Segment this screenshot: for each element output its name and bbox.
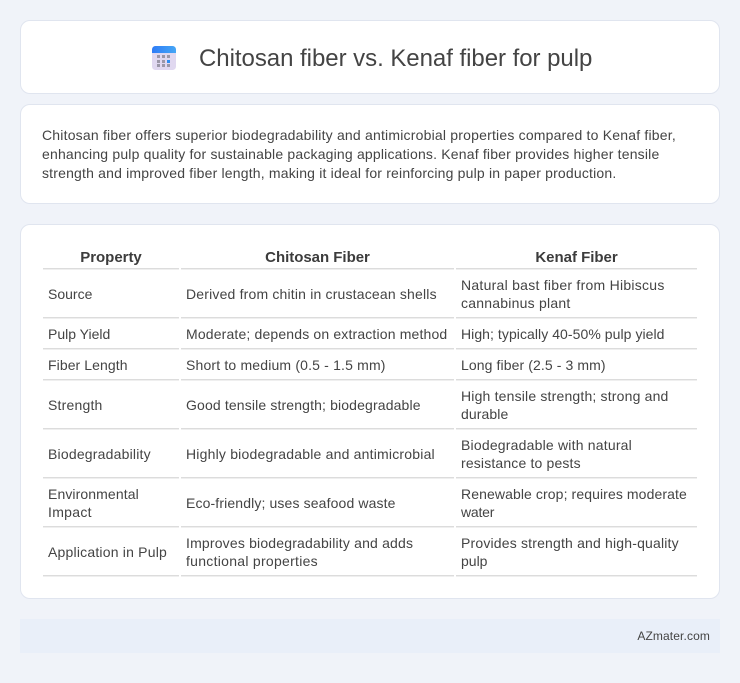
row: strength: durable [461,406,508,422]
row: fiber length: Long fiber (2.5 - 3 mm) [461,357,606,373]
row: biodegradability [48,437,632,471]
table header: Kenaf Fiber [535,249,618,266]
row: application in pulp: Improves biodegradability and adds [186,535,413,551]
row: fiber length: Fiber Length [48,357,128,373]
title: Chitosan fiber vs. Kenaf fiber for pulp [199,45,592,72]
row: strength: High tensile strength; strong and [461,388,669,404]
summary card [20,104,720,204]
table header: Property [80,249,142,266]
row: biodegradability: Highly biodegradable and antimicrobial [186,446,435,462]
comparison table [43,249,697,577]
summary text: Chitosan fiber offers superior biodegradability and antimicrobial properties compared to Kenaf fiber, [42,127,676,143]
row: source: Source [48,286,92,302]
summary text: enhancing pulp quality for sustainable packaging applications. Kenaf fiber provides higher tensile [42,146,659,162]
row: pulp yield: Moderate; depends on extraction method [186,326,447,342]
footer credit: AZmater.com [637,629,710,643]
row: pulp yield: High; typically 40-50% pulp yield [461,326,665,342]
summary text [42,127,676,181]
row: fiber length: Short to medium (0.5 - 1.5 mm) [186,357,386,373]
table header: Chitosan Fiber [265,249,370,266]
row: strength: Strength [48,397,103,413]
row: source: cannabinus plant [461,295,571,311]
row: strength: Good tensile strength; biodegradable [186,397,421,413]
row: environmental impact [48,486,687,520]
row: environmental impact: Impact [48,504,92,520]
row: pulp yield: Pulp Yield [48,326,110,342]
row: fiber length [48,357,606,373]
row: environmental impact: Eco-friendly; uses seafood waste [186,495,396,511]
row: application in pulp: Provides strength and high-quality [461,535,679,551]
table header [80,249,618,266]
row: environmental impact: Renewable crop; requires moderate [461,486,687,502]
row: source: Natural bast fiber from Hibiscus [461,277,665,293]
footer bar [20,619,720,653]
row: biodegradability: resistance to pests [461,455,581,471]
icon: calendar [152,46,176,70]
row: application in pulp: pulp [461,553,487,569]
row: application in pulp [48,535,679,569]
row: application in pulp: Application in Pulp [48,544,167,560]
table card [20,224,720,599]
row: biodegradability: Biodegradability [48,446,151,462]
row: source [48,277,665,311]
row: pulp yield [48,326,665,342]
row: biodegradability: Biodegradable with natural [461,437,632,453]
title card [20,20,720,94]
summary text: strength and improved fiber length, making it ideal for reinforcing pulp in paper production. [42,165,616,181]
row: environmental impact: water [461,504,494,520]
row: strength [48,388,669,422]
row: application in pulp: functional properties [186,553,318,569]
row: source: Derived from chitin in crustacean shells [186,286,437,302]
row: environmental impact: Environmental [48,486,139,502]
